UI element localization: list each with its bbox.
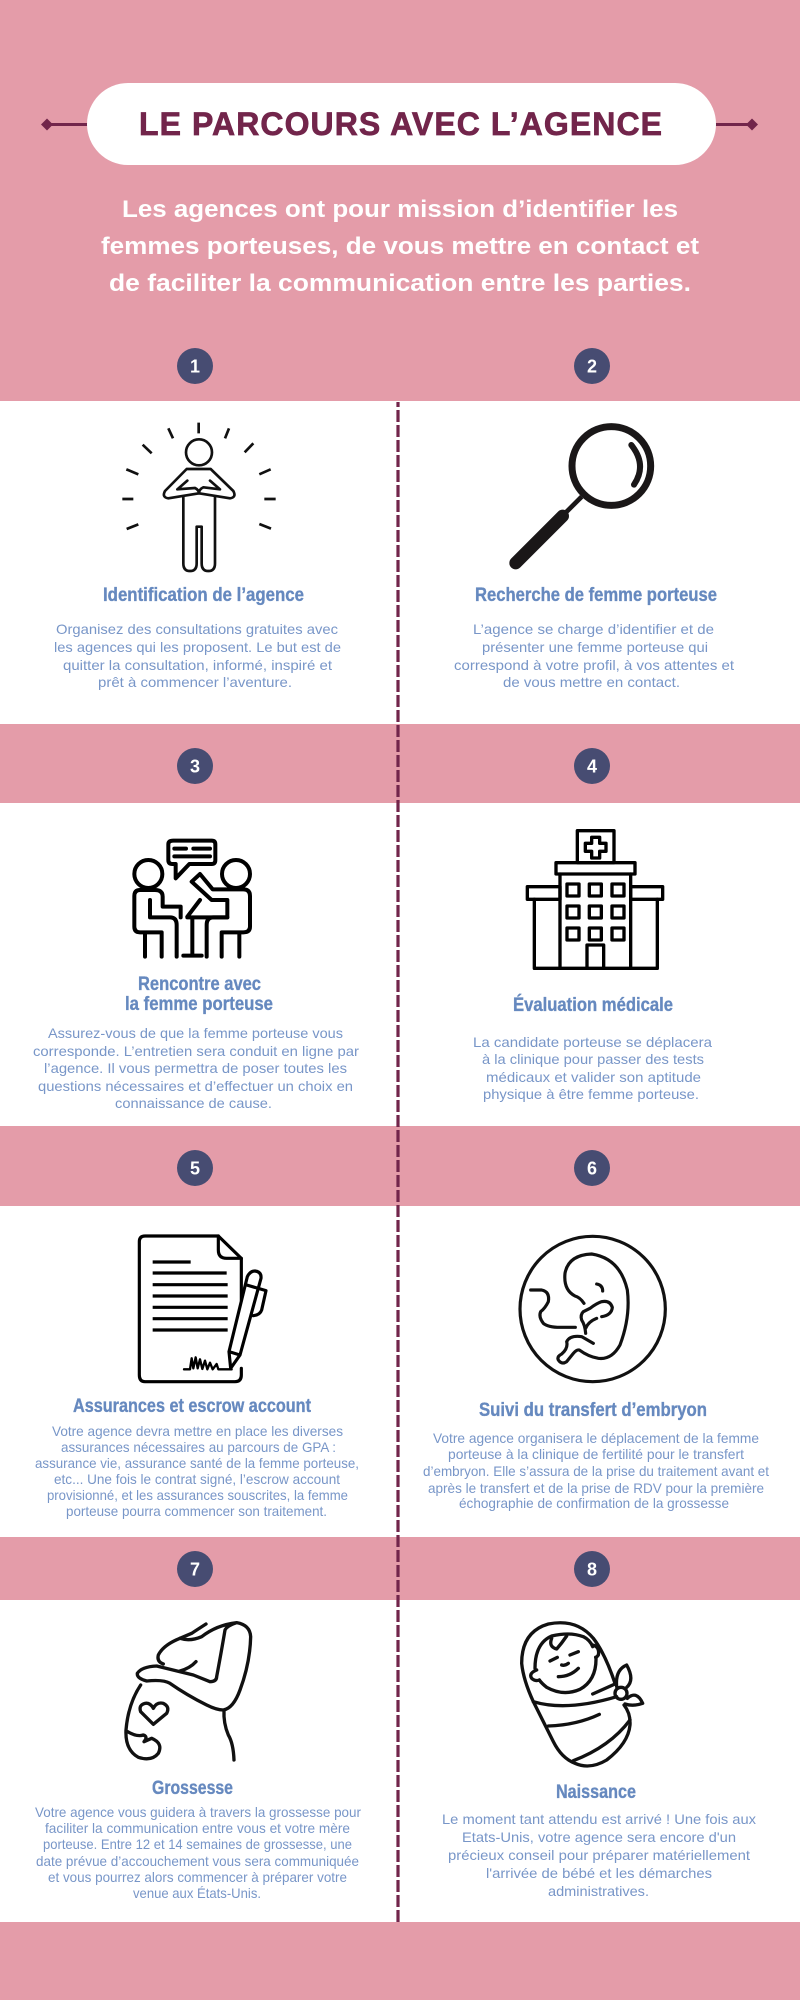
heading: Évaluation médicale	[513, 994, 673, 1016]
badge 8	[574, 1551, 610, 1587]
badge 4: 4	[587, 756, 597, 776]
description	[473, 1034, 712, 1102]
title banner: LE PARCOURS AVEC L’AGENCE	[139, 106, 662, 142]
icon: two people talking	[134, 841, 250, 957]
heading: Suivi du transfert d’embryon	[479, 1400, 707, 1421]
description: après le transfert et de la prise de RDV pour la première	[428, 1480, 764, 1496]
description: Votre agence vous guidera à travers la grossesse pour	[35, 1804, 361, 1820]
description: assurance vie, assurance santé de la femme porteuse,	[35, 1455, 359, 1471]
description: de vous mettre en contact.	[503, 674, 680, 690]
icon: radiant person	[122, 423, 276, 571]
description: Votre agence devra mettre en place les diverses	[52, 1423, 343, 1439]
description: provisionné, et les assurances souscrites, la femme	[47, 1487, 348, 1503]
description: l’agence. Il vous permettra de poser toutes les	[44, 1060, 347, 1076]
badge 5: 5	[190, 1158, 200, 1178]
description: L’agence se charge d’identifier et de	[473, 621, 714, 637]
description: porteuse pourra commencer son traitement.	[66, 1503, 327, 1519]
icon: swaddled baby	[522, 1623, 643, 1766]
badge 4	[574, 748, 610, 784]
description	[35, 1423, 359, 1519]
description	[442, 1811, 756, 1899]
description: porteuse à la clinique de fertilité pour le transfert	[448, 1446, 744, 1462]
badge 8: 8	[587, 1560, 597, 1580]
heading: Grossesse	[152, 1778, 233, 1799]
description	[454, 621, 734, 690]
description: assurances nécessaires au parcours de GPA :	[61, 1439, 336, 1455]
heading: la femme porteuse	[125, 994, 273, 1015]
description: porteuse. Entre 12 et 14 semaines de grossesse, une	[43, 1836, 352, 1852]
description: Organisez des consultations gratuites avec	[56, 621, 338, 637]
intro text: femmes porteuses, de vous mettre en contact et	[101, 233, 699, 260]
description: Le moment tant attendu est arrivé ! Une fois aux	[442, 1811, 756, 1827]
heading: Recherche de femme porteuse	[475, 585, 717, 606]
icon: embryo	[520, 1236, 665, 1382]
description: échographie de confirmation de la grossesse	[459, 1495, 729, 1511]
description: les agences qui les proposent. Le but est de	[54, 639, 341, 655]
badge 7: 7	[190, 1560, 200, 1580]
description: connaissance de cause.	[115, 1095, 272, 1111]
panel: step 5 insurance	[0, 1206, 398, 1537]
icon: magnifying glass	[516, 427, 651, 563]
heading: Assurances et escrow account	[73, 1396, 312, 1417]
description: à la clinique pour passer des tests	[482, 1051, 704, 1067]
badge 6	[574, 1150, 610, 1186]
badge 2	[574, 348, 610, 384]
badge 6: 6	[587, 1158, 597, 1178]
badge 3: 3	[190, 756, 200, 776]
description: Etats-Unis, votre agence sera encore d'un	[462, 1829, 736, 1845]
title banner	[41, 83, 758, 165]
badge 1	[177, 348, 213, 384]
description: correspond à votre profil, à vos attentes et	[454, 657, 734, 673]
intro text: Les agences ont pour mission d’identifier les	[122, 196, 678, 223]
description: administratives.	[548, 1883, 649, 1899]
description: l'arrivée de bébé et les démarches	[486, 1865, 712, 1881]
description: etc... Une fois le contrat signé, l’escrow account	[54, 1471, 340, 1487]
heading: Rencontre avec	[138, 974, 261, 995]
description: quitter la consultation, informé, inspiré et	[63, 657, 332, 673]
description	[35, 1804, 361, 1901]
heading	[125, 974, 273, 1015]
description: questions nécessaires et d’effectuer un choix en	[38, 1078, 353, 1094]
badge 3	[177, 748, 213, 784]
description: précieux conseil pour préparer matériellement	[448, 1847, 750, 1863]
panel: step 2 search	[398, 401, 800, 724]
description	[54, 621, 341, 690]
dashed center divider	[396, 402, 400, 1922]
description	[33, 1025, 359, 1111]
badge 5	[177, 1150, 213, 1186]
description: date prévue d’accouchement vous sera communiquée	[36, 1853, 359, 1869]
description	[423, 1430, 769, 1511]
intro text	[101, 196, 699, 297]
heading: Identification de l’agence	[103, 585, 304, 606]
panel: step 6 embryo transfer	[398, 1206, 800, 1537]
description: physique à être femme porteuse.	[483, 1086, 699, 1102]
description: médicaux et valider son aptitude	[486, 1069, 701, 1085]
intro text: de faciliter la communication entre les parties.	[109, 270, 691, 297]
description: La candidate porteuse se déplacera	[473, 1034, 712, 1050]
badge 1: 1	[190, 356, 200, 376]
panel: step 8 birth	[398, 1600, 800, 1922]
panel: step 3 meeting	[0, 803, 398, 1126]
icon: pregnant belly	[126, 1623, 251, 1760]
icon: hospital	[527, 831, 663, 968]
icon: signed document	[139, 1236, 266, 1382]
description: d’embryon. Elle s’assura de la prise du traitement avant et	[423, 1463, 769, 1479]
description: Assurez-vous de que la femme porteuse vous	[48, 1025, 343, 1041]
panel: step 7 pregnancy	[0, 1600, 398, 1922]
badge 2: 2	[587, 356, 597, 376]
description: venue aux États-Unis.	[133, 1885, 261, 1901]
description: faciliter la communication entre vous et votre mère	[45, 1820, 350, 1836]
panel: step 1 identification	[0, 401, 398, 724]
description: présenter une femme porteuse qui	[482, 639, 708, 655]
heading: Naissance	[556, 1782, 636, 1803]
badge 7	[177, 1551, 213, 1587]
description: prêt à commencer l’aventure.	[98, 674, 292, 690]
description: Votre agence organisera le déplacement de la femme	[433, 1430, 759, 1446]
description: et vous pourrez alors commencer à préparer votre	[48, 1869, 347, 1885]
panel: step 4 medical evaluation	[398, 803, 800, 1126]
description: corresponde. L’entretien sera conduit en ligne par	[33, 1043, 359, 1059]
